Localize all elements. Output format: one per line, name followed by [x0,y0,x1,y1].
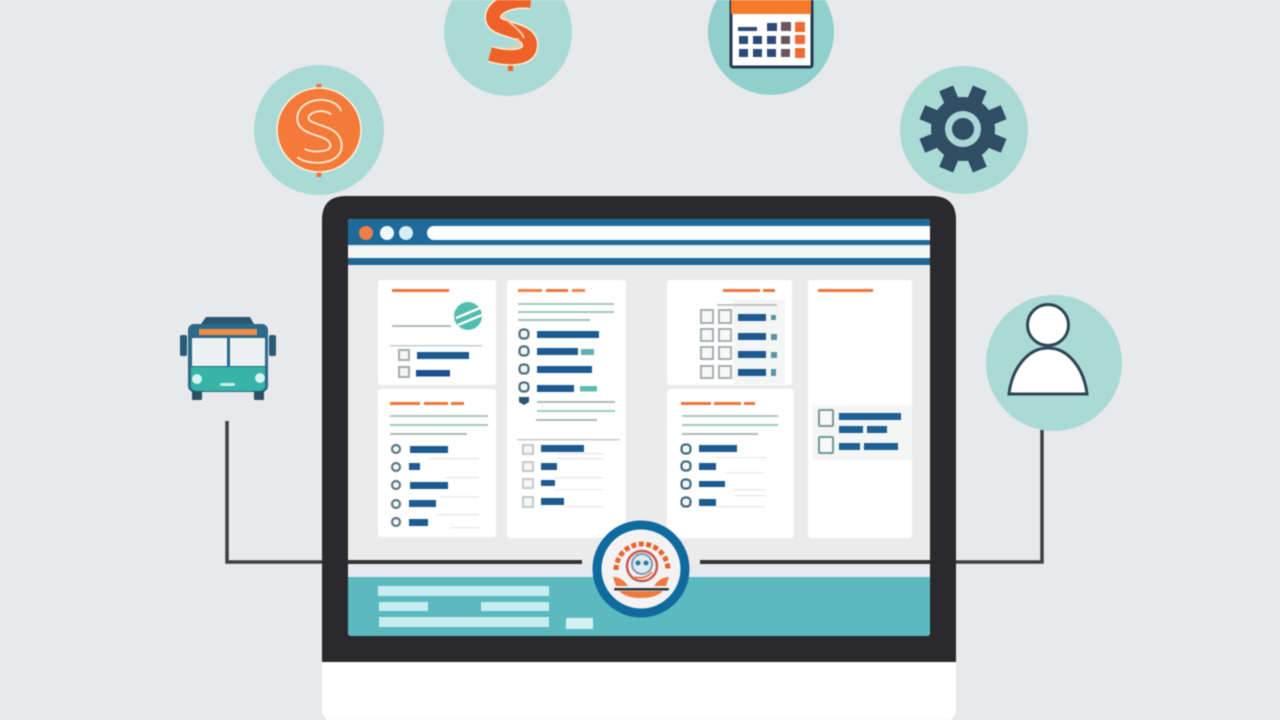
footer band [348,565,930,636]
screen background [348,219,930,636]
panel: third column lower card [667,389,794,538]
divider right of badge [700,560,930,564]
logo badge [597,525,685,613]
divider left of badge [348,560,582,564]
panel: right column card [808,280,912,538]
browser toolbar [348,219,930,265]
panel: lower left card [378,389,496,537]
panel: top left card [378,280,496,385]
panel: third column top card [667,280,792,385]
panel: second column card [507,280,626,538]
connector line: bus to monitor [227,421,324,562]
icon: bus [180,317,276,400]
monitor [322,196,956,662]
connector line: person to monitor [954,430,1042,562]
monitor stand base [322,655,956,720]
icon: dollar coin [254,65,384,195]
icon: person [986,295,1122,431]
icon: dollar sign [444,0,572,96]
icon: gear [900,66,1028,194]
icon: calendar [708,0,834,95]
